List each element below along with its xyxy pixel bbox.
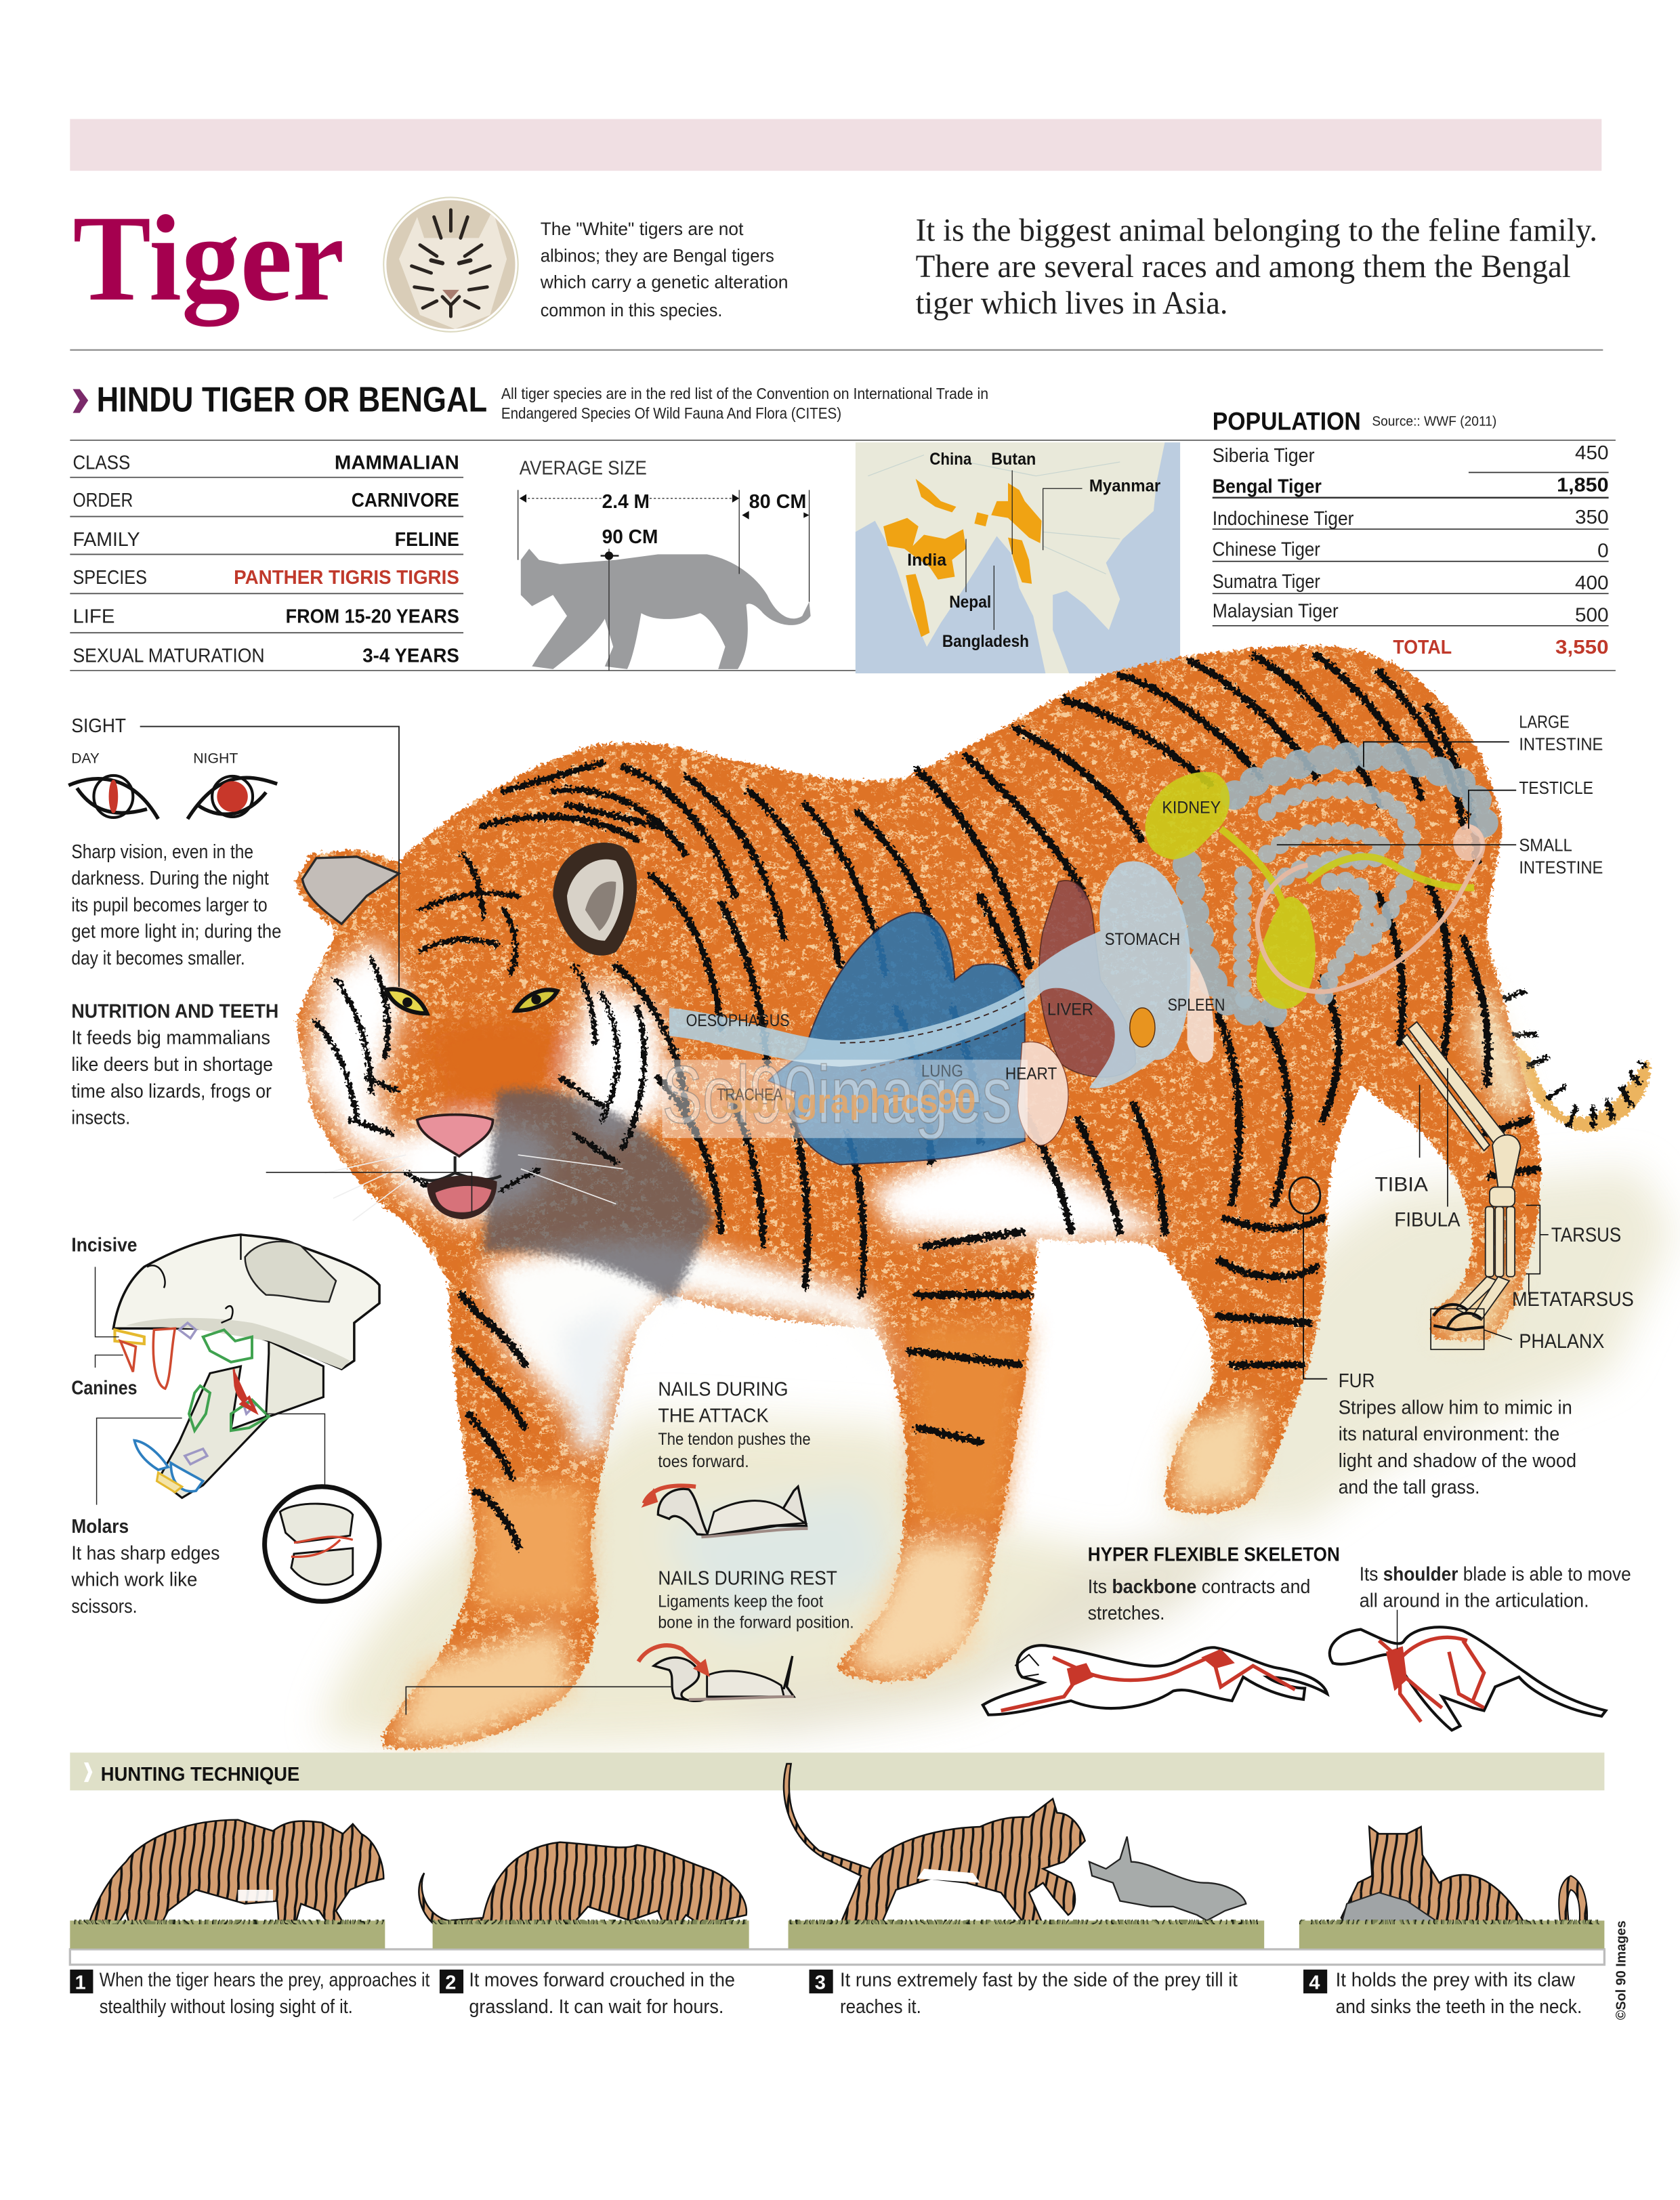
large intestine, testicle, small intestine labels: LARGE <box>1519 713 1570 732</box>
scene 1: tiger approaching <box>87 1820 383 1946</box>
organ labels <box>686 799 1225 1104</box>
organ labels: SPLEEN <box>1168 996 1225 1015</box>
teeth labels: scissors. <box>71 1596 138 1617</box>
pink header band <box>70 119 1601 171</box>
range map: Butan <box>991 450 1036 469</box>
step 1: When the tiger hears the prey, approaches it <box>100 1970 429 1991</box>
fur callout: light and shadow of the wood <box>1339 1450 1576 1472</box>
organ labels: HEART <box>1005 1065 1057 1083</box>
sight heading and leader line: SIGHT <box>71 715 126 737</box>
sight text <box>71 841 281 969</box>
intro text: There are several races and among them the Bengal <box>916 249 1571 284</box>
sight heading and leader line <box>71 715 399 987</box>
night eye: NIGHT <box>193 749 238 766</box>
scene 4: tiger holding prey <box>1341 1827 1587 1943</box>
range map <box>856 442 1180 675</box>
white tiger note: The "White" tigers are not <box>541 219 744 239</box>
classification table: SEXUAL MATURATION <box>72 646 265 667</box>
sight text: darkness. During the night <box>71 868 269 889</box>
step 4 <box>1303 1970 1582 2018</box>
population table: Sumatra Tiger <box>1213 571 1320 593</box>
ground strip <box>70 1949 1604 1965</box>
lungs <box>769 912 1025 1164</box>
organ labels: LIVER <box>1047 1000 1093 1019</box>
incisors <box>114 1330 144 1344</box>
large intestine, testicle, small intestine labels: INTESTINE <box>1519 859 1603 878</box>
step 2: grassland. It can wait for hours. <box>469 1996 723 2018</box>
population table: Bengal Tiger <box>1213 475 1322 497</box>
nails during rest: Ligaments keep the foot <box>658 1593 823 1611</box>
testicle and duct <box>1257 824 1484 992</box>
white tiger note: albinos; they are Bengal tigers <box>541 245 774 266</box>
nutrition and teeth text <box>71 1000 278 1129</box>
nails during rest: bone in the forward position. <box>658 1614 854 1632</box>
classification table: 3-4 YEARS <box>362 646 459 667</box>
organ labels: OESOPHAGUS <box>686 1012 790 1030</box>
fur callout: Stripes allow him to mimic in <box>1339 1397 1572 1418</box>
stripes: flank and rump <box>459 655 1537 1547</box>
hyper flexible skeleton text: all around in the articulation. <box>1360 1590 1589 1612</box>
range map: India <box>907 551 946 570</box>
tiger right ear <box>553 843 637 956</box>
hyper flexible skeleton text: HYPER FLEXIBLE SKELETON <box>1088 1544 1340 1565</box>
teeth labels: which work like <box>70 1569 197 1591</box>
hunting technique band: HUNTING TECHNIQUE <box>101 1764 299 1785</box>
day eye: DAY <box>71 749 100 766</box>
skull diagram <box>113 1235 379 1498</box>
hyper flexible skeleton text <box>1088 1544 1631 1624</box>
organ labels: STOMACH <box>1105 931 1180 949</box>
average size diagram <box>518 458 811 671</box>
step 3: It runs extremely fast by the side of the prey till it <box>840 1970 1238 1991</box>
nutrition and teeth text: insects. <box>71 1107 130 1129</box>
sight text: Sharp vision, even in the <box>71 841 253 863</box>
ground wash <box>322 1169 1673 1746</box>
classification table <box>70 452 463 667</box>
nails during rest <box>406 1567 854 1715</box>
red list note: All tiger species are in the red list of the Convention on International Trade in <box>501 385 988 402</box>
step 3 <box>810 1970 1238 2018</box>
range map: Nepal <box>949 593 991 612</box>
nutrition and teeth text: like deers but in shortage <box>71 1054 273 1076</box>
teeth labels: Canines <box>71 1377 138 1399</box>
lower incisors <box>156 1473 182 1492</box>
large intestine, testicle, small intestine labels <box>1519 713 1603 878</box>
step 2: 2 <box>445 1972 456 1994</box>
copyright credit: ©Sol 90 Images <box>1613 1920 1629 2020</box>
hyper flexible skeleton text: stretches. <box>1088 1603 1164 1624</box>
sight text: get more light in; during the <box>71 921 281 943</box>
oesophagus and trachea <box>669 987 1029 1067</box>
population table: 1,850 <box>1557 474 1609 496</box>
intro text: tiger which lives in Asia. <box>916 286 1227 321</box>
heart <box>1017 1042 1068 1145</box>
main tiger illustration <box>297 646 1650 1749</box>
lower canines <box>134 1441 203 1492</box>
small intestine <box>1242 790 1412 1008</box>
population table: Indochinese Tiger <box>1213 508 1354 530</box>
population table: TOTAL <box>1393 637 1452 658</box>
grass patches <box>70 1920 1604 1949</box>
nails during the attack: NAILS DURING <box>658 1378 789 1400</box>
contracted cat skeleton <box>1330 1610 1605 1730</box>
leg bone labels: PHALANX <box>1519 1330 1604 1353</box>
fur callout: FUR <box>1339 1370 1374 1392</box>
whiskers <box>324 1155 623 1221</box>
classification table: SPECIES <box>72 567 147 589</box>
large intestine <box>1188 756 1484 1013</box>
range map: China <box>929 450 971 469</box>
red list note: Endangered Species Of Wild Fauna And Flora (CITES) <box>501 404 841 422</box>
canines <box>121 1328 175 1389</box>
hunting technique band <box>70 1752 1604 1790</box>
step 2 <box>440 1970 735 2018</box>
night eye <box>188 749 277 819</box>
leg bone labels: METATARSUS <box>1512 1288 1634 1311</box>
watermark band: Sotographics90 <box>721 1082 975 1120</box>
tiger body <box>297 646 1540 1749</box>
organ labels: LUNG <box>921 1062 963 1080</box>
watermark band: Sol90images <box>663 1049 1012 1140</box>
population table: Siberia Tiger <box>1213 445 1315 467</box>
liver <box>1039 881 1135 1077</box>
population table: 450 <box>1575 442 1609 464</box>
classification table: CLASS <box>72 452 130 473</box>
leg bone labels <box>1374 1174 1634 1353</box>
red list note <box>501 385 988 422</box>
population table: Malaysian Tiger <box>1213 600 1339 622</box>
bladder and ureters <box>1221 828 1474 1009</box>
average size diagram: 2.4 M <box>602 491 650 513</box>
day eye <box>68 749 159 819</box>
classification table: CARNIVORE <box>352 490 459 511</box>
leg skeleton <box>1402 1022 1549 1349</box>
kidney <box>1146 772 1230 860</box>
leg bone labels: TARSUS <box>1551 1224 1621 1246</box>
classification table: FROM 15-20 YEARS <box>286 606 459 628</box>
hyper flexible skeleton text: Its backbone contracts and <box>1088 1576 1310 1598</box>
upper skull <box>113 1235 379 1369</box>
bite arrow <box>234 1369 256 1412</box>
population table <box>1213 442 1609 658</box>
population heading <box>1213 406 1496 435</box>
premolars <box>180 1323 255 1464</box>
white tiger note: common in this species. <box>541 300 722 320</box>
leg bone labels: TIBIA <box>1374 1174 1428 1196</box>
population table: 3,550 <box>1555 637 1609 658</box>
classification table: FAMILY <box>72 529 140 551</box>
tiger tail <box>1474 928 1650 1132</box>
fur callout: its natural environment: the <box>1339 1424 1559 1445</box>
fur whites <box>308 938 1526 1743</box>
title: Tiger <box>72 190 344 326</box>
step 2: It moves forward crouched in the <box>469 1970 735 1991</box>
fur callout <box>1289 1177 1576 1498</box>
section heading: Hindu tiger or Bengal: HINDU TIGER OR BENGAL <box>97 380 487 419</box>
classification table: ORDER <box>72 490 133 511</box>
scene 3: fleeing boar <box>1089 1836 1246 1920</box>
icon: white tiger portrait <box>383 197 518 336</box>
classification table: LIFE <box>72 606 114 628</box>
step 4: 4 <box>1309 1972 1320 1994</box>
sight text: its pupil becomes larger to <box>71 894 268 916</box>
average size diagram: 90 CM <box>602 526 658 548</box>
step 3: reaches it. <box>840 1996 921 2018</box>
molars <box>189 1330 269 1431</box>
large intestine, testicle, small intestine labels: SMALL <box>1519 837 1572 855</box>
step 1 <box>70 1970 429 2018</box>
nails during the attack: The tendon pushes the <box>658 1431 811 1449</box>
teeth labels <box>70 1235 219 1617</box>
stretched cat skeleton <box>983 1645 1327 1715</box>
teeth labels: It has sharp edges <box>71 1542 219 1564</box>
icon: molar detail magnifier <box>265 1487 379 1601</box>
teeth labels: Incisive <box>71 1235 138 1256</box>
hyper flexible skeleton text: Its shoulder blade is able to move <box>1360 1563 1631 1585</box>
tiger left ear <box>302 857 399 924</box>
organ leader lines <box>1277 742 1516 845</box>
large intestine, testicle, small intestine labels: TESTICLE <box>1519 779 1593 798</box>
icon: extended claw <box>642 1485 807 1537</box>
pancreas <box>1130 1008 1155 1047</box>
stripes: head <box>315 854 644 1190</box>
leader line to mouth <box>266 1172 471 1212</box>
step 4: and sinks the teeth in the neck. <box>1336 1996 1582 2018</box>
step 1: stealthily without losing sight of it. <box>100 1996 353 2018</box>
nutrition and teeth text: time also lizards, frogs or <box>71 1080 272 1102</box>
population heading: Source:: WWF (2011) <box>1372 413 1496 429</box>
nails during rest: NAILS DURING REST <box>658 1567 837 1589</box>
step 1: 1 <box>75 1972 86 1994</box>
icon: retracted claw <box>638 1645 794 1701</box>
nutrition and teeth text: It feeds big mammalians <box>71 1028 270 1049</box>
classification table: MAMMALIAN <box>335 452 459 473</box>
population table: 400 <box>1575 572 1609 594</box>
population heading: POPULATION <box>1213 406 1361 435</box>
tiger eyes <box>386 989 558 1013</box>
icon: tiger silhouette <box>521 549 811 669</box>
organ labels: TRACHEA <box>717 1086 783 1104</box>
population table: 350 <box>1575 507 1609 528</box>
intro text <box>916 213 1597 321</box>
stomach <box>1025 862 1190 1088</box>
range map: Bangladesh <box>942 633 1029 651</box>
range map: Myanmar <box>1089 477 1161 495</box>
white tiger note <box>540 219 789 320</box>
nutrition and teeth text: NUTRITION AND TEETH <box>71 1000 278 1022</box>
teeth labels: Molars <box>71 1516 129 1538</box>
lower jaw <box>159 1341 323 1498</box>
organ overlay <box>663 742 1516 1164</box>
step 4: It holds the prey with its claw <box>1336 1970 1575 1991</box>
population table: 500 <box>1575 605 1609 627</box>
spleen <box>1188 952 1214 1063</box>
leg bone labels: FIBULA <box>1394 1208 1461 1231</box>
population table: 0 <box>1597 541 1609 562</box>
tiger nose and mouth <box>417 1115 501 1219</box>
average size diagram: 80 CM <box>749 491 806 513</box>
population table: Chinese Tiger <box>1213 538 1320 560</box>
step 3: 3 <box>815 1972 826 1994</box>
scene 3: tiger running <box>784 1764 1085 1939</box>
fur callout: and the tall grass. <box>1339 1477 1479 1498</box>
nails during the attack: THE ATTACK <box>658 1405 769 1427</box>
organ labels: KIDNEY <box>1162 799 1221 818</box>
classification table: PANTHER TIGRIS TIGRIS <box>234 567 459 589</box>
classification table: FELINE <box>395 529 459 551</box>
sight text: day it becomes smaller. <box>71 948 245 969</box>
stripes: shoulder and neck <box>483 763 952 1295</box>
intro text: It is the biggest animal belonging to the feline family. <box>916 213 1597 248</box>
average size diagram: AVERAGE SIZE <box>520 458 647 480</box>
nails during the attack <box>642 1378 811 1537</box>
nails during the attack: toes forward. <box>658 1453 749 1471</box>
large intestine, testicle, small intestine labels: INTESTINE <box>1519 736 1603 755</box>
scene 2: tiger crouching <box>419 1842 747 1939</box>
white tiger note: which carry a genetic alteration <box>540 272 789 293</box>
